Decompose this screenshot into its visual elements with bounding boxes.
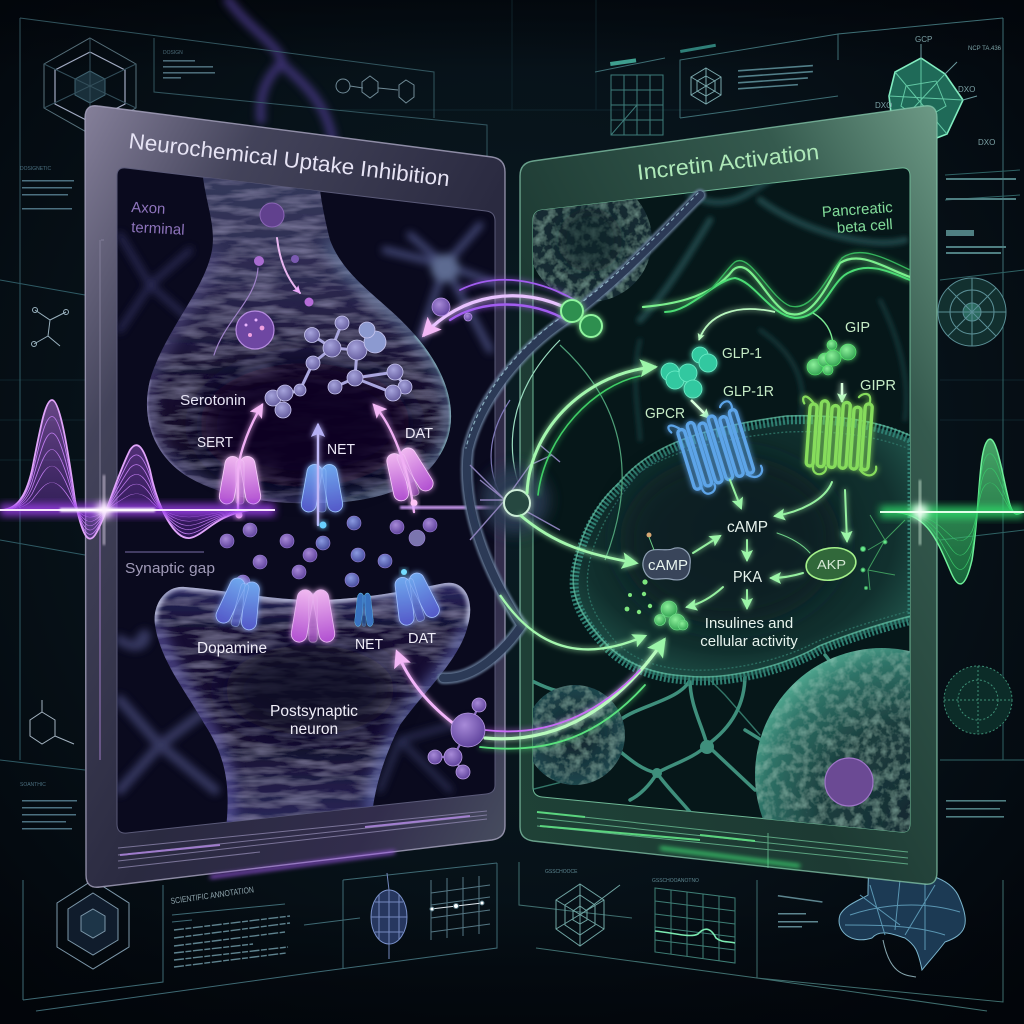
icon: molecule chain xyxy=(336,76,414,103)
GIP curve xyxy=(813,313,833,345)
connecting arcs xyxy=(491,340,622,560)
background HUD: bottom-left xyxy=(23,863,497,1011)
label: dopamine: Dopamine xyxy=(197,640,267,657)
labels: radar axes: DXO xyxy=(875,101,892,110)
icon: side hexagon molecule xyxy=(30,700,74,744)
label: insulines and cellular activity: cellular activity xyxy=(700,633,798,650)
nerve branch xyxy=(443,193,700,678)
label: insulines and cellular activity: Insulines and xyxy=(705,615,793,632)
label: GLP-1R: GLP-1R xyxy=(723,383,774,400)
pill: cAMP: cAMP xyxy=(648,557,688,574)
panel frame xyxy=(520,106,937,884)
chart: grid with dots xyxy=(430,876,490,940)
label: title: Neurochemical Uptake Inhibition xyxy=(127,128,451,191)
icon: mesh circle lower xyxy=(944,666,1012,734)
vesicle: top xyxy=(254,203,314,306)
label: NET bottom: NET xyxy=(355,636,383,653)
label: SERT: SERT xyxy=(197,434,233,451)
arrow: purple to axon terminal xyxy=(424,280,575,335)
arrow: green to GLP-1 xyxy=(527,367,655,495)
inner viewport xyxy=(117,168,495,833)
glow spot on DAT xyxy=(401,569,407,575)
label: postsynaptic neuron: neuron xyxy=(290,721,338,738)
background HUD: bottom-right xyxy=(519,862,1003,1011)
GLP-1 arrow xyxy=(699,309,775,340)
labels: radar axes: NCP TA.436 xyxy=(968,46,1002,52)
text: annotation lines xyxy=(174,916,290,967)
panel: neurochemical uptake inhibition xyxy=(85,106,505,887)
arrows into receptors xyxy=(691,383,842,418)
band details xyxy=(537,812,908,868)
label: pancreatic beta cell: beta cell xyxy=(836,216,893,237)
small molecule: purple xyxy=(432,298,472,321)
background HUD: top-right xyxy=(595,18,1003,280)
transporter: dopamine xyxy=(213,573,268,633)
chart: bottom line chart xyxy=(655,888,735,963)
heading: scientific annotation: SCIENTIFIC ANNOTATION xyxy=(170,884,254,906)
transporter: NET top xyxy=(300,463,344,513)
node: green pair xyxy=(561,300,602,337)
icon: bottom web xyxy=(556,884,620,946)
postsynaptic neuron shape xyxy=(155,583,470,830)
icon: small web xyxy=(691,68,721,104)
icon: radar hexagon xyxy=(44,38,136,134)
receptor: GIPR xyxy=(798,390,881,478)
labels: radar axes: GCP xyxy=(915,35,932,44)
signal line: green axis xyxy=(880,480,1024,545)
text: bottom-right note: GSSCHOOCE xyxy=(545,869,578,875)
labels: radar axes xyxy=(875,35,1002,147)
label: serotonin: Serotonin xyxy=(180,392,246,409)
vesicle: large xyxy=(236,311,274,349)
label: axon terminal: Axon xyxy=(131,199,166,218)
text: right notes xyxy=(946,178,1016,818)
label: synaptic gap: Synaptic gap xyxy=(125,560,215,577)
label: pancreatic beta cell xyxy=(821,199,894,237)
receptor: GLP-1R xyxy=(666,397,765,499)
label: insulines and cellular activity xyxy=(700,615,798,650)
label: GIPR: GIPR xyxy=(860,377,896,394)
panel frame xyxy=(85,106,505,887)
label: NET top: NET xyxy=(327,441,355,458)
text: left notes: DOSIGNETIC xyxy=(20,166,52,172)
signal line: purple axis xyxy=(0,475,500,545)
icon: mesh organ xyxy=(839,870,965,977)
text: bottom-right note: GSSCHOOANOTNO xyxy=(652,878,699,884)
label: PKA: PKA xyxy=(733,569,763,586)
GIP molecule xyxy=(807,340,856,375)
mesh hub xyxy=(470,445,560,540)
molecule: bottom xyxy=(428,698,486,779)
text: top-left note: DOSIGN xyxy=(163,50,183,56)
text: bottom-right note xyxy=(545,869,823,928)
waveform: purple left xyxy=(0,400,250,539)
beta cell membrane xyxy=(573,416,912,681)
green signal wave xyxy=(643,253,910,318)
label: GIP: GIP xyxy=(845,319,870,336)
background HUD: left side xyxy=(0,166,85,830)
pill: cAMP xyxy=(643,532,690,580)
blurred neurons inside panel xyxy=(120,225,500,790)
cell network lower xyxy=(530,655,833,812)
background cell upper-left xyxy=(533,199,652,302)
arrows inside axon xyxy=(214,238,300,355)
label: postsynaptic neuron xyxy=(270,703,358,738)
background HUD: right side xyxy=(938,170,1024,818)
label: DAT bottom: DAT xyxy=(408,630,436,647)
text: top-right note xyxy=(610,44,813,90)
text: left notes: SOANTHIC xyxy=(20,782,46,788)
icon: mesh blob xyxy=(371,873,407,959)
pill: AKP: AKP xyxy=(817,557,846,572)
label: axon terminal xyxy=(131,199,185,239)
transporter: center xyxy=(290,589,336,643)
icon: green radar xyxy=(889,44,977,144)
text: top-left note xyxy=(163,50,215,79)
label: GPCR: GPCR xyxy=(645,405,685,422)
transporter: DAT bottom xyxy=(386,568,443,629)
transporter: DAT top xyxy=(378,442,437,505)
icon: mesh circle upper xyxy=(938,278,1006,346)
panel: incretin activation xyxy=(519,105,938,885)
label: cAMP: cAMP xyxy=(727,519,768,536)
faint nerve branches xyxy=(636,165,906,440)
icon: bottom radar hexagon xyxy=(57,880,129,969)
arrow: bottom molecule to dopamine side xyxy=(397,652,458,727)
label: title: Incretin Activation xyxy=(636,139,820,185)
icon: side molecule xyxy=(32,308,68,346)
pill: AKP xyxy=(804,545,858,583)
green cluster xyxy=(654,601,688,630)
label: synaptic gap xyxy=(125,552,215,577)
bidirectional arrow xyxy=(313,582,315,690)
nucleus xyxy=(825,758,873,806)
glowing lower edge xyxy=(660,848,800,866)
waveform: green right xyxy=(890,439,1024,584)
label: axon terminal: terminal xyxy=(131,219,185,239)
label: postsynaptic neuron: Postsynaptic xyxy=(270,703,358,720)
label: pancreatic beta cell: Pancreatic xyxy=(821,199,894,221)
chart: grid xyxy=(611,75,663,135)
dots near cluster xyxy=(625,579,652,614)
uptake arrows xyxy=(238,405,414,525)
arrow: green lower loop xyxy=(500,595,645,649)
arrow: green to cAMP pill xyxy=(520,515,636,563)
glow terminals xyxy=(236,500,418,528)
background HUD: top-left xyxy=(20,18,487,280)
band details xyxy=(100,240,487,868)
signalling arrows xyxy=(687,480,847,608)
serotonin molecule xyxy=(265,316,412,418)
GLP-1 molecule xyxy=(661,347,717,398)
transporter: small NET xyxy=(354,592,374,627)
synaptic particles xyxy=(220,516,437,589)
glowing lower edge xyxy=(210,852,395,877)
labels: radar axes: DXO xyxy=(978,138,995,147)
central connector structure xyxy=(397,193,700,779)
large cell lower-right xyxy=(755,648,910,832)
text: left notes xyxy=(20,166,77,830)
labels: radar axes: DXO xyxy=(958,85,975,94)
dots network near AKP xyxy=(860,515,905,590)
inner viewport xyxy=(533,168,910,832)
cell lower-left xyxy=(525,685,625,785)
label: DAT top: DAT xyxy=(405,425,433,442)
blurred background neurons xyxy=(228,0,610,205)
transporter: SERT xyxy=(218,455,262,505)
label: GLP-1: GLP-1 xyxy=(722,345,762,362)
arrow: combined lower strands xyxy=(480,640,664,749)
axon terminal shape xyxy=(147,170,451,503)
